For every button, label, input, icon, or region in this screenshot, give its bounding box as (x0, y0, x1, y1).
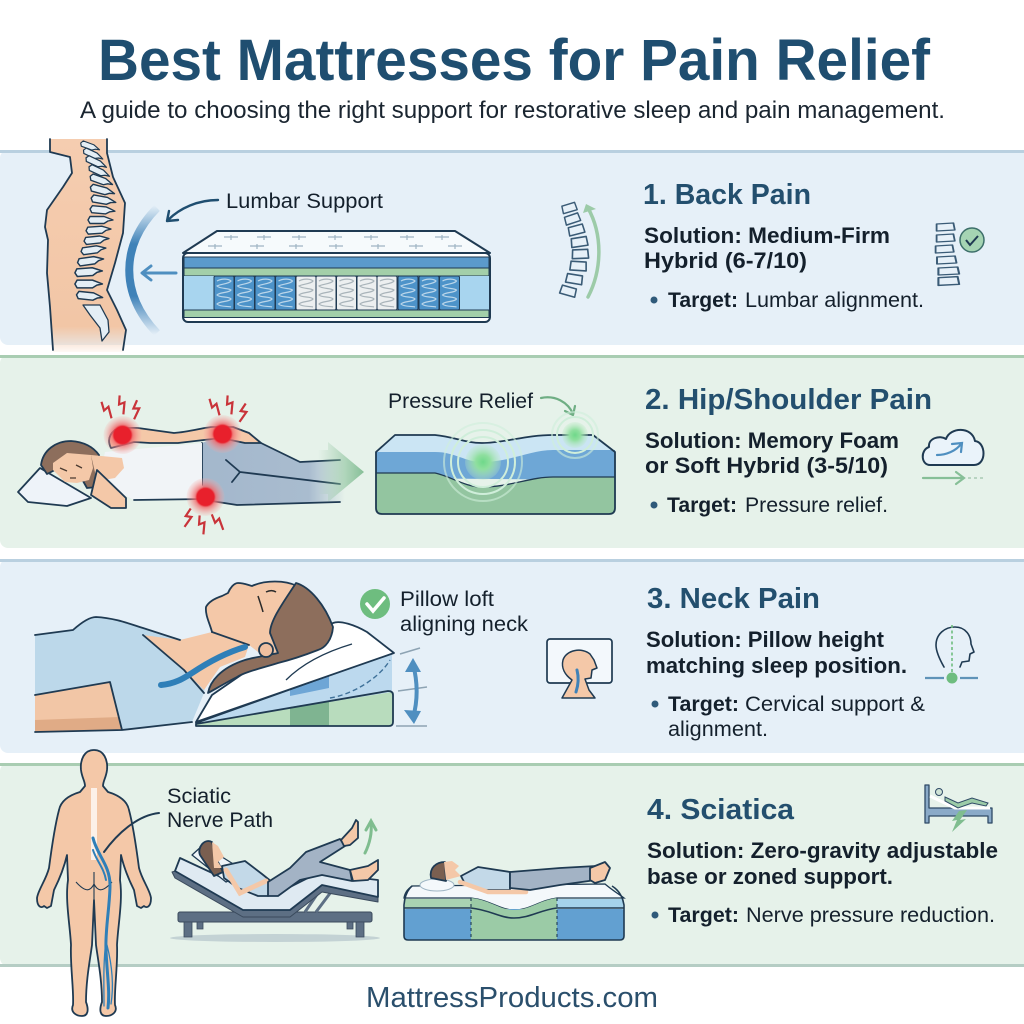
target bullet: Target: (668, 289, 738, 312)
solution text: Solution: Memory Foam (645, 428, 899, 453)
target bullet: alignment. (668, 718, 768, 741)
label: pillow loft: Pillow loft (400, 588, 494, 611)
reclined sleeper on wedge pillow (35, 582, 427, 732)
footer: website: MattressProducts.com (366, 982, 658, 1014)
adjustable base bed (170, 820, 380, 942)
solution text line 2: or Soft Hybrid (3-5/10) (645, 453, 888, 478)
icon: head alignment (925, 625, 978, 684)
solution text: Solution: Pillow height (646, 627, 885, 652)
reclined person (199, 820, 378, 896)
back view body with nerve path (37, 750, 151, 1016)
lift arrow (365, 821, 376, 853)
target bullet: Target: (667, 494, 737, 517)
target bullet: Lumbar alignment. (745, 289, 924, 312)
body with spine (45, 139, 126, 352)
arrow to body (142, 266, 176, 280)
solution text line 2: Hybrid (6-7/10) (644, 248, 807, 273)
icon: aligned spine with check (936, 223, 984, 285)
label: sciatic nerve path: Sciatic (167, 785, 231, 808)
heading: neck pain: 3. Neck Pain (647, 583, 820, 615)
support arc (129, 208, 157, 333)
icon: head on pillow (547, 639, 612, 698)
hybrid mattress (183, 231, 490, 322)
subtitle: A guide to choosing the right support for restorative sleep and pain management. (80, 97, 945, 124)
pain points (101, 395, 251, 534)
person lying flat (420, 861, 610, 892)
icon: adjustable bed (925, 785, 992, 832)
height arrow (396, 648, 427, 726)
solution text line 2: matching sleep position. (646, 653, 907, 678)
title: Best Mattresses for Pain Relief (98, 28, 931, 93)
leader arrow (167, 200, 218, 221)
icon: check badge (360, 589, 390, 619)
panel: back pain (0, 139, 1024, 352)
side sleeper (18, 395, 345, 534)
target bullet: Target: (668, 904, 739, 927)
heading: back pain: 1. Back Pain (643, 179, 811, 211)
solution text line 2: base or zoned support. (647, 864, 893, 889)
solution text: Solution: Medium-Firm (644, 223, 890, 248)
heading: sciatica: 4. Sciatica (647, 794, 795, 826)
neck alignment line (161, 647, 245, 685)
heading: hip and shoulder pain: 2. Hip/Shoulder Pain (645, 384, 932, 416)
transition arrow (318, 442, 364, 502)
target bullet: Target: (668, 693, 739, 716)
wedge pillow (196, 622, 394, 726)
icon: cloud with arrow (923, 430, 984, 484)
panel: neck pain (0, 559, 1024, 753)
panel: sciatica (0, 750, 1024, 1016)
label: lumbar support: Lumbar Support (226, 190, 383, 213)
target bullet (652, 693, 925, 741)
target bullet (650, 494, 888, 517)
label: pressure relief: Pressure Relief (388, 390, 533, 413)
label: sciatic nerve path: Nerve Path (167, 809, 273, 832)
icon: spine with arrow (560, 202, 599, 298)
label: pillow loft: aligning neck (400, 613, 529, 636)
label: pillow loft (400, 588, 529, 636)
pressure relief glow (444, 412, 598, 501)
target bullet: Cervical support & (745, 693, 925, 716)
label: sciatic nerve path (167, 785, 273, 832)
panel: hip and shoulder pain (0, 355, 1024, 548)
memory foam block (376, 412, 615, 514)
leader line (104, 813, 159, 852)
target bullet: Nerve pressure reduction. (746, 904, 995, 927)
zoned support mattress (404, 861, 624, 940)
target bullet (650, 289, 924, 312)
target bullet: Pressure relief. (745, 494, 888, 517)
leader arrow (541, 397, 575, 415)
solution text: Solution: Zero-gravity adjustable (647, 838, 998, 863)
